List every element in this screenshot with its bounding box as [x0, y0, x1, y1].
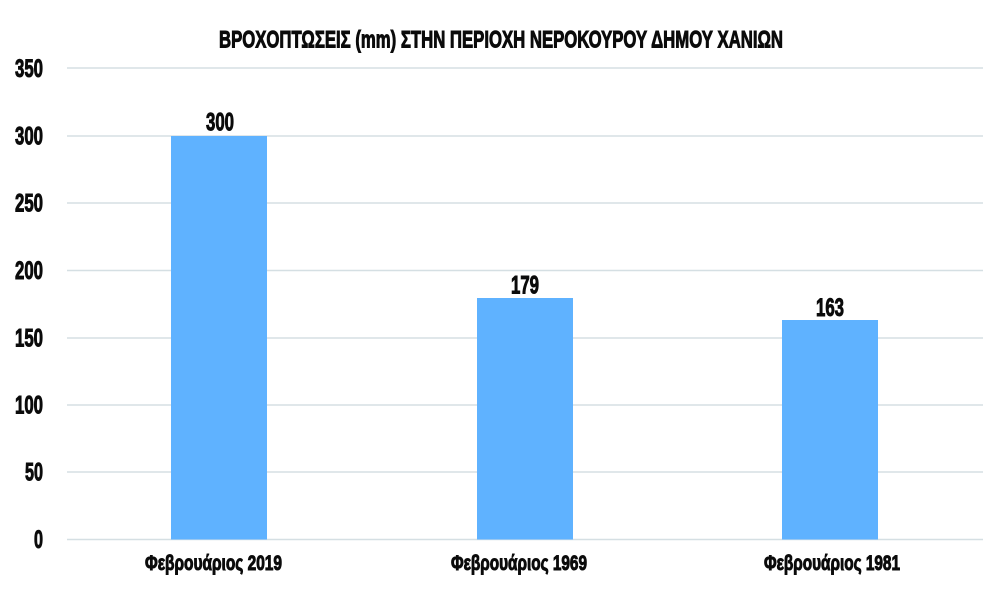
value label: 300: 300 — [206, 108, 234, 136]
category label: February 2019: Φεβρουάριος 2019 — [145, 552, 282, 575]
bar: February 1969 — [477, 298, 573, 540]
y axis labels — [15, 55, 43, 554]
y axis labels: 250 — [15, 190, 43, 218]
value label: 163: 163 — [816, 294, 844, 322]
y axis labels: 100 — [15, 392, 43, 420]
y axis labels: 150 — [15, 324, 43, 352]
y axis labels: 50 — [25, 458, 43, 486]
value label: 179: 179 — [511, 272, 539, 300]
category label: February 1981: Φεβρουάριος 1981 — [764, 552, 900, 575]
y axis labels: 0 — [34, 526, 43, 554]
bar: February 2019 — [171, 136, 267, 540]
y axis labels: 200 — [15, 257, 43, 285]
y axis labels: 300 — [15, 122, 43, 150]
category label: February 1969: Φεβρουάριος 1969 — [451, 552, 587, 575]
bar: February 1981 — [782, 320, 878, 540]
y axis labels: 350 — [15, 55, 43, 83]
